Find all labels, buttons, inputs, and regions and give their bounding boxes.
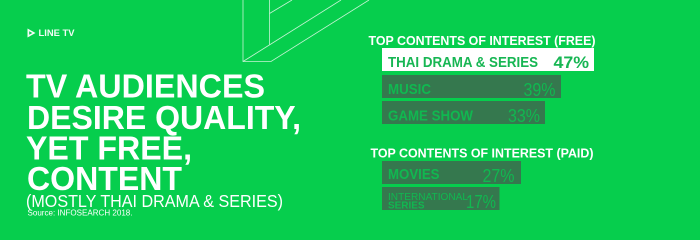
title: YET FREE, [26,130,192,166]
bar: movies: MOVIES [388,166,440,183]
bar: movies: 27% [482,166,514,186]
logo: LINE TV: LINE TV [38,28,75,39]
bar: music: 39% [524,80,556,100]
title [26,68,301,197]
heading: paid contents: TOP CONTENTS OF INTEREST (PAID) [370,146,594,160]
bar: international series: 17% [466,192,496,212]
bar: game show: 33% [508,106,540,126]
title: TV AUDIENCES [26,68,265,104]
title: DESIRE QUALITY, [27,99,301,136]
bar: international series: SERIES [388,200,424,212]
title: CONTENT [27,160,182,197]
bar: game show [382,101,545,126]
bar: international series: INTERNATIONAL [388,191,468,203]
bar: international series [382,187,500,212]
bar: movies [382,161,521,186]
source note: Source: INFOSEARCH 2018. [28,208,132,218]
icon: decorative 3D frame lines [243,0,369,62]
heading: free contents: TOP CONTENTS OF INTEREST (FREE) [368,33,596,48]
bar: music: MUSIC [388,81,431,98]
bar: game show: GAME SHOW [388,108,474,124]
subtitle: (MOSTLY THAI DRAMA & SERIES) [26,191,283,211]
bar: thai drama and series [382,48,594,72]
bar: music [382,75,561,100]
bar: thai drama and series: THAI DRAMA & SERIES [388,54,538,71]
infographic canvas [26,0,595,216]
bar: thai drama and series: 47% [554,53,589,72]
